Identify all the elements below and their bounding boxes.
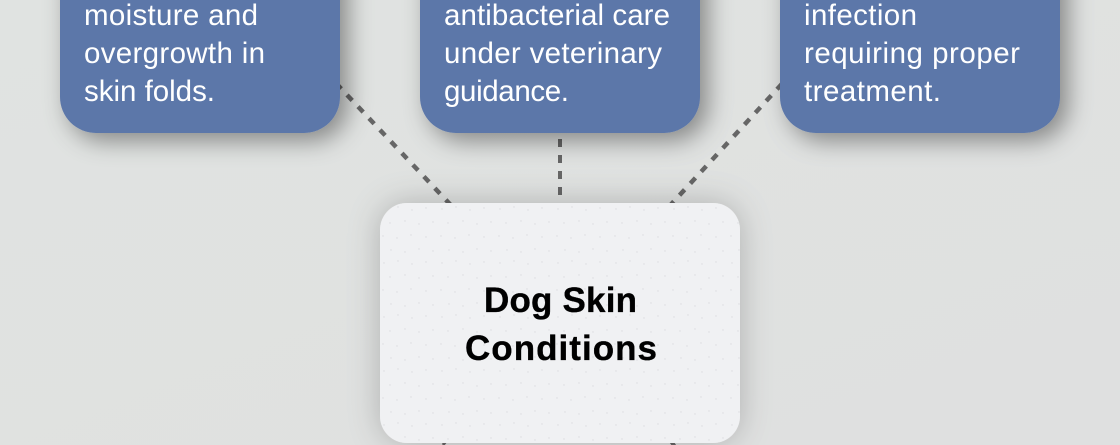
heading: Dog Skin Conditions bbox=[465, 281, 657, 368]
connector: center to lower right bbox=[671, 441, 675, 445]
middle card text: guidance. bbox=[444, 75, 569, 108]
panel: middle card bbox=[420, 0, 700, 133]
panel: right card bbox=[780, 0, 1060, 133]
left card text: overgrowth in bbox=[84, 37, 265, 70]
right card text: treatment. bbox=[804, 75, 941, 108]
connector: center to lower left bbox=[443, 441, 446, 445]
heading: Dog Skin Conditions: Conditions bbox=[465, 329, 657, 368]
connector: left card to center bbox=[336, 83, 456, 211]
connector: middle card to center bbox=[558, 139, 562, 211]
heading: Dog Skin Conditions: Dog Skin bbox=[484, 281, 637, 320]
left card text bbox=[84, 0, 265, 108]
right card text bbox=[804, 0, 1020, 108]
connector: right card to center bbox=[665, 84, 782, 211]
panel: left card bbox=[60, 0, 340, 133]
left card text: skin folds. bbox=[84, 75, 215, 108]
middle card text: under veterinary bbox=[444, 37, 662, 70]
panel: center card bbox=[380, 203, 740, 443]
right card text: requiring proper bbox=[804, 37, 1020, 70]
middle card text bbox=[444, 0, 670, 108]
